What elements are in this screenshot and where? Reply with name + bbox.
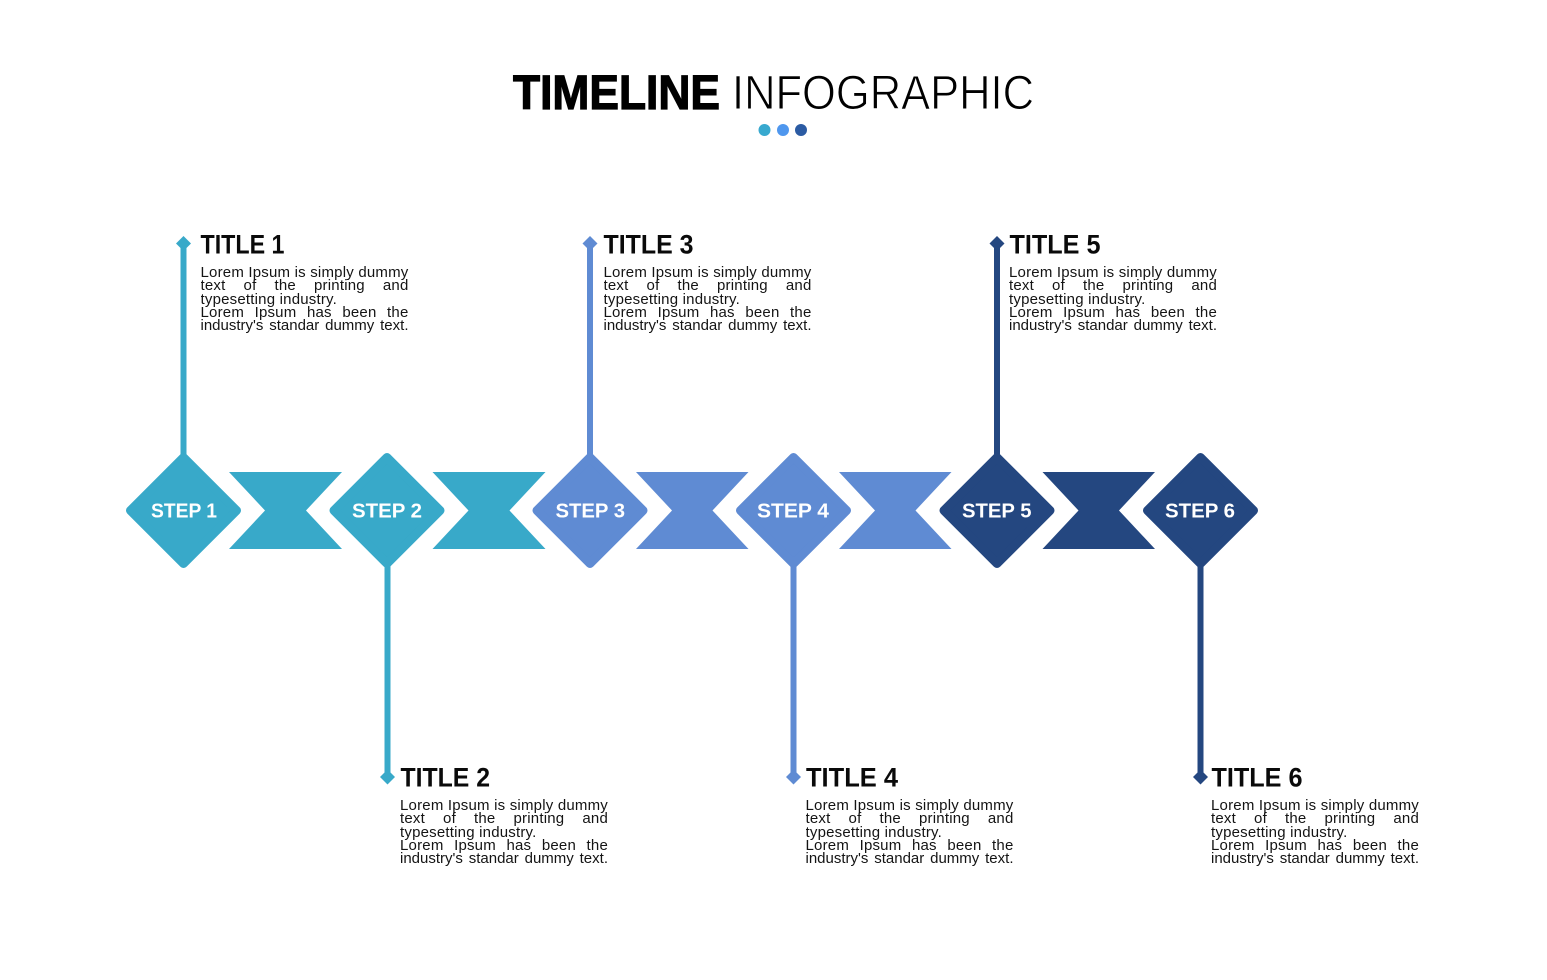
text block 5: Lorem Ipsum has been the bbox=[1009, 304, 1217, 321]
connector bow 2 bbox=[432, 472, 546, 549]
heading 1: TITLE 1 bbox=[200, 230, 284, 260]
step 2 diamond bbox=[334, 458, 440, 564]
heading 6: TITLE 6 bbox=[1212, 762, 1302, 792]
text block 4: Lorem Ipsum has been the bbox=[806, 837, 1014, 854]
text block 2: text of the printing and bbox=[400, 810, 608, 827]
text block 6: industry's standar dummy text. bbox=[1211, 850, 1419, 867]
connector line 2 bbox=[384, 560, 390, 777]
text block 4: industry's standar dummy text. bbox=[806, 850, 1014, 867]
step 5 diamond bbox=[944, 458, 1050, 564]
text block 4: text of the printing and bbox=[806, 810, 1014, 827]
title: INFOGRAPHIC bbox=[732, 67, 1034, 120]
step 2 diamond: STEP 2 bbox=[352, 500, 422, 522]
text block 2 bbox=[400, 799, 608, 869]
panel: title 6 bbox=[1193, 560, 1419, 869]
text block 4 bbox=[806, 799, 1014, 869]
text block 1 bbox=[200, 266, 408, 336]
marker 3 bbox=[582, 236, 598, 251]
marker 2 bbox=[380, 770, 395, 784]
heading 4: TITLE 4 bbox=[806, 762, 898, 792]
text block 3 bbox=[604, 266, 812, 336]
text block 2: typesetting industry. bbox=[400, 824, 536, 841]
text block 5: text of the printing and bbox=[1009, 277, 1217, 294]
text block 3: industry's standar dummy text. bbox=[604, 317, 812, 334]
connector line 5 bbox=[994, 243, 1000, 460]
heading 3: TITLE 3 bbox=[604, 230, 694, 260]
text block 6: text of the printing and bbox=[1211, 810, 1419, 827]
marker 5 bbox=[990, 236, 1004, 251]
connector line 3 bbox=[587, 243, 593, 460]
step 4 diamond bbox=[740, 458, 846, 564]
step 4 diamond: STEP 4 bbox=[757, 500, 830, 522]
panel: title 1 bbox=[176, 230, 408, 460]
connector line 1 bbox=[180, 243, 186, 460]
title bbox=[513, 67, 1034, 120]
text block 6 bbox=[1211, 799, 1419, 869]
text block 6: Lorem Ipsum has been the bbox=[1211, 837, 1419, 854]
heading 2: TITLE 2 bbox=[400, 762, 490, 792]
connector line 6 bbox=[1198, 560, 1204, 777]
step 1 diamond: STEP 1 bbox=[151, 500, 217, 522]
step 6 diamond bbox=[1148, 458, 1254, 564]
text block 1: Lorem Ipsum has been the bbox=[200, 304, 408, 321]
step 3 diamond bbox=[537, 458, 643, 564]
step 5 diamond: STEP 5 bbox=[962, 500, 1032, 522]
marker 4 bbox=[786, 770, 801, 784]
title dots bbox=[758, 124, 807, 136]
step 1 diamond bbox=[130, 458, 236, 564]
panel: title 2 bbox=[380, 560, 608, 869]
text block 6: typesetting industry. bbox=[1211, 824, 1348, 841]
text block 2: industry's standar dummy text. bbox=[400, 850, 608, 867]
panel: title 3 bbox=[582, 230, 812, 460]
text block 3: text of the printing and bbox=[604, 277, 812, 294]
text block 1: industry's standar dummy text. bbox=[200, 317, 408, 334]
connector bow 5 bbox=[1042, 472, 1155, 549]
connector bow 3 bbox=[636, 472, 748, 549]
heading 5: TITLE 5 bbox=[1010, 230, 1100, 260]
text block 1: typesetting industry. bbox=[200, 291, 337, 308]
text block 3: typesetting industry. bbox=[604, 291, 740, 308]
text block 1: text of the printing and bbox=[200, 277, 408, 294]
text block 5: industry's standar dummy text. bbox=[1009, 317, 1217, 334]
connector line 4 bbox=[790, 560, 796, 777]
text block 4: typesetting industry. bbox=[806, 824, 942, 841]
text block 5: typesetting industry. bbox=[1009, 291, 1146, 308]
title: TIMELINE bbox=[513, 67, 720, 120]
panel: title 5 bbox=[990, 230, 1217, 460]
connector bow 1 bbox=[229, 472, 342, 549]
connector bow 4 bbox=[839, 472, 952, 549]
marker 6 bbox=[1193, 770, 1208, 784]
step 6 diamond: STEP 6 bbox=[1165, 500, 1235, 522]
marker 1 bbox=[176, 236, 191, 251]
panel: title 4 bbox=[786, 560, 1014, 869]
text block 2: Lorem Ipsum has been the bbox=[400, 837, 608, 854]
text block 5 bbox=[1009, 266, 1217, 336]
text block 3: Lorem Ipsum has been the bbox=[604, 304, 812, 321]
step 3 diamond: STEP 3 bbox=[556, 500, 625, 522]
